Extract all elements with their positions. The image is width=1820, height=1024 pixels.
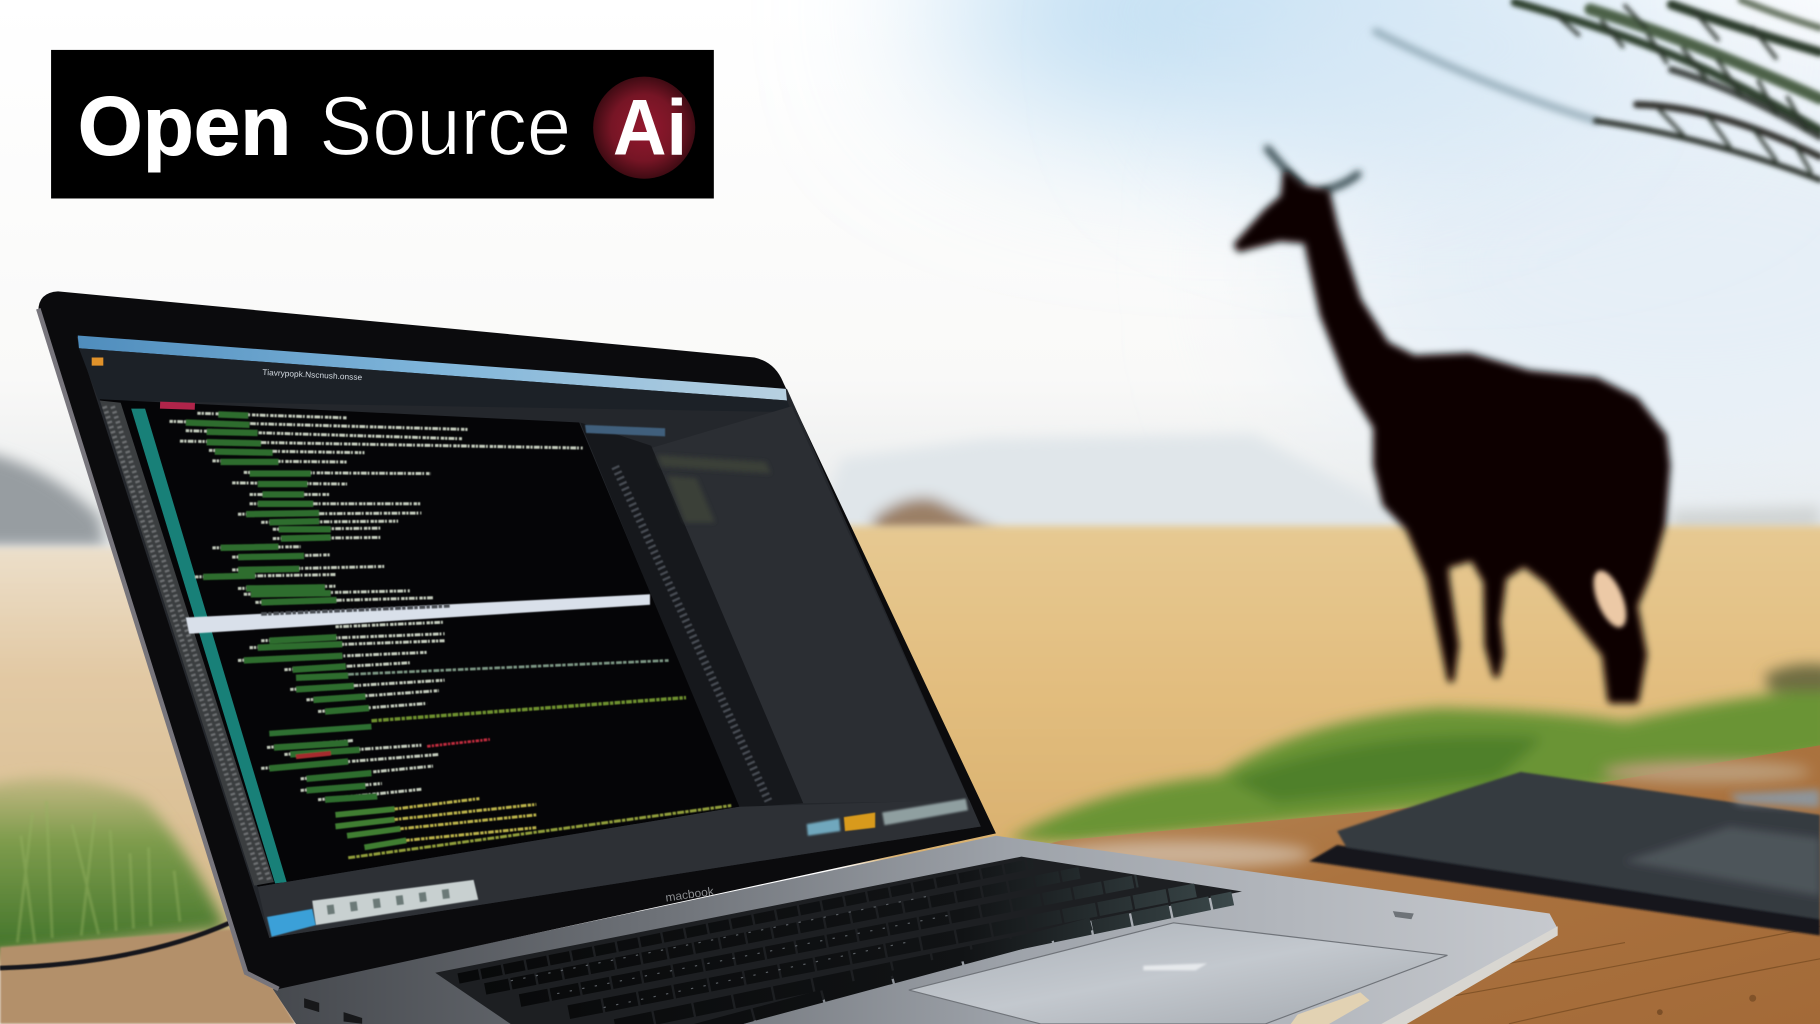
trackpad [909, 923, 1447, 1024]
front edge [1381, 926, 1558, 1024]
taskbar blue icons [267, 909, 316, 937]
editor tab bar [79, 348, 792, 412]
window title bar [78, 335, 787, 400]
teal fold strip [131, 409, 287, 883]
power cable [0, 923, 230, 968]
logo word: Source: Source [319, 78, 571, 172]
wooden table [0, 745, 1820, 1024]
logo badge: Ai [593, 77, 695, 179]
logo banner [51, 50, 714, 198]
screen bottom band [258, 800, 981, 938]
error tag [160, 402, 195, 410]
code text lines [169, 413, 731, 858]
taskbar light strip [312, 880, 478, 925]
laptop brand label: macbook [665, 885, 715, 905]
logo badge: Ai: Ai [613, 83, 687, 171]
llama silhouette [1237, 149, 1667, 700]
line number gutter [100, 400, 274, 886]
right file sidebar [580, 423, 803, 808]
laptop base [273, 836, 1558, 1024]
left grass [0, 777, 226, 956]
front latch [1291, 992, 1370, 1024]
logo word: Open: Open [78, 78, 291, 172]
code pane [100, 399, 739, 887]
right editor pane [651, 406, 969, 803]
keyboard [435, 857, 1242, 1024]
taskbar tray icons [807, 818, 840, 836]
taskbar orange icon [844, 813, 875, 831]
side ports [304, 998, 362, 1024]
distant mountains [0, 434, 1820, 546]
acacia tree branch [1375, 0, 1820, 180]
golden savanna field [0, 526, 1820, 966]
sky background [0, 0, 1820, 557]
trackpad logo [1393, 911, 1414, 919]
window menu icon [92, 358, 103, 366]
tablet on table [1309, 772, 1820, 936]
laptop screen [77, 335, 981, 938]
right grass strip [1008, 664, 1820, 843]
highlighted selection line [186, 594, 650, 634]
trackpad reflection [1143, 963, 1207, 970]
laptop lid bezel [38, 291, 996, 989]
editor tab title: Tiavrypopk.Nscnush.onsse [262, 368, 363, 382]
